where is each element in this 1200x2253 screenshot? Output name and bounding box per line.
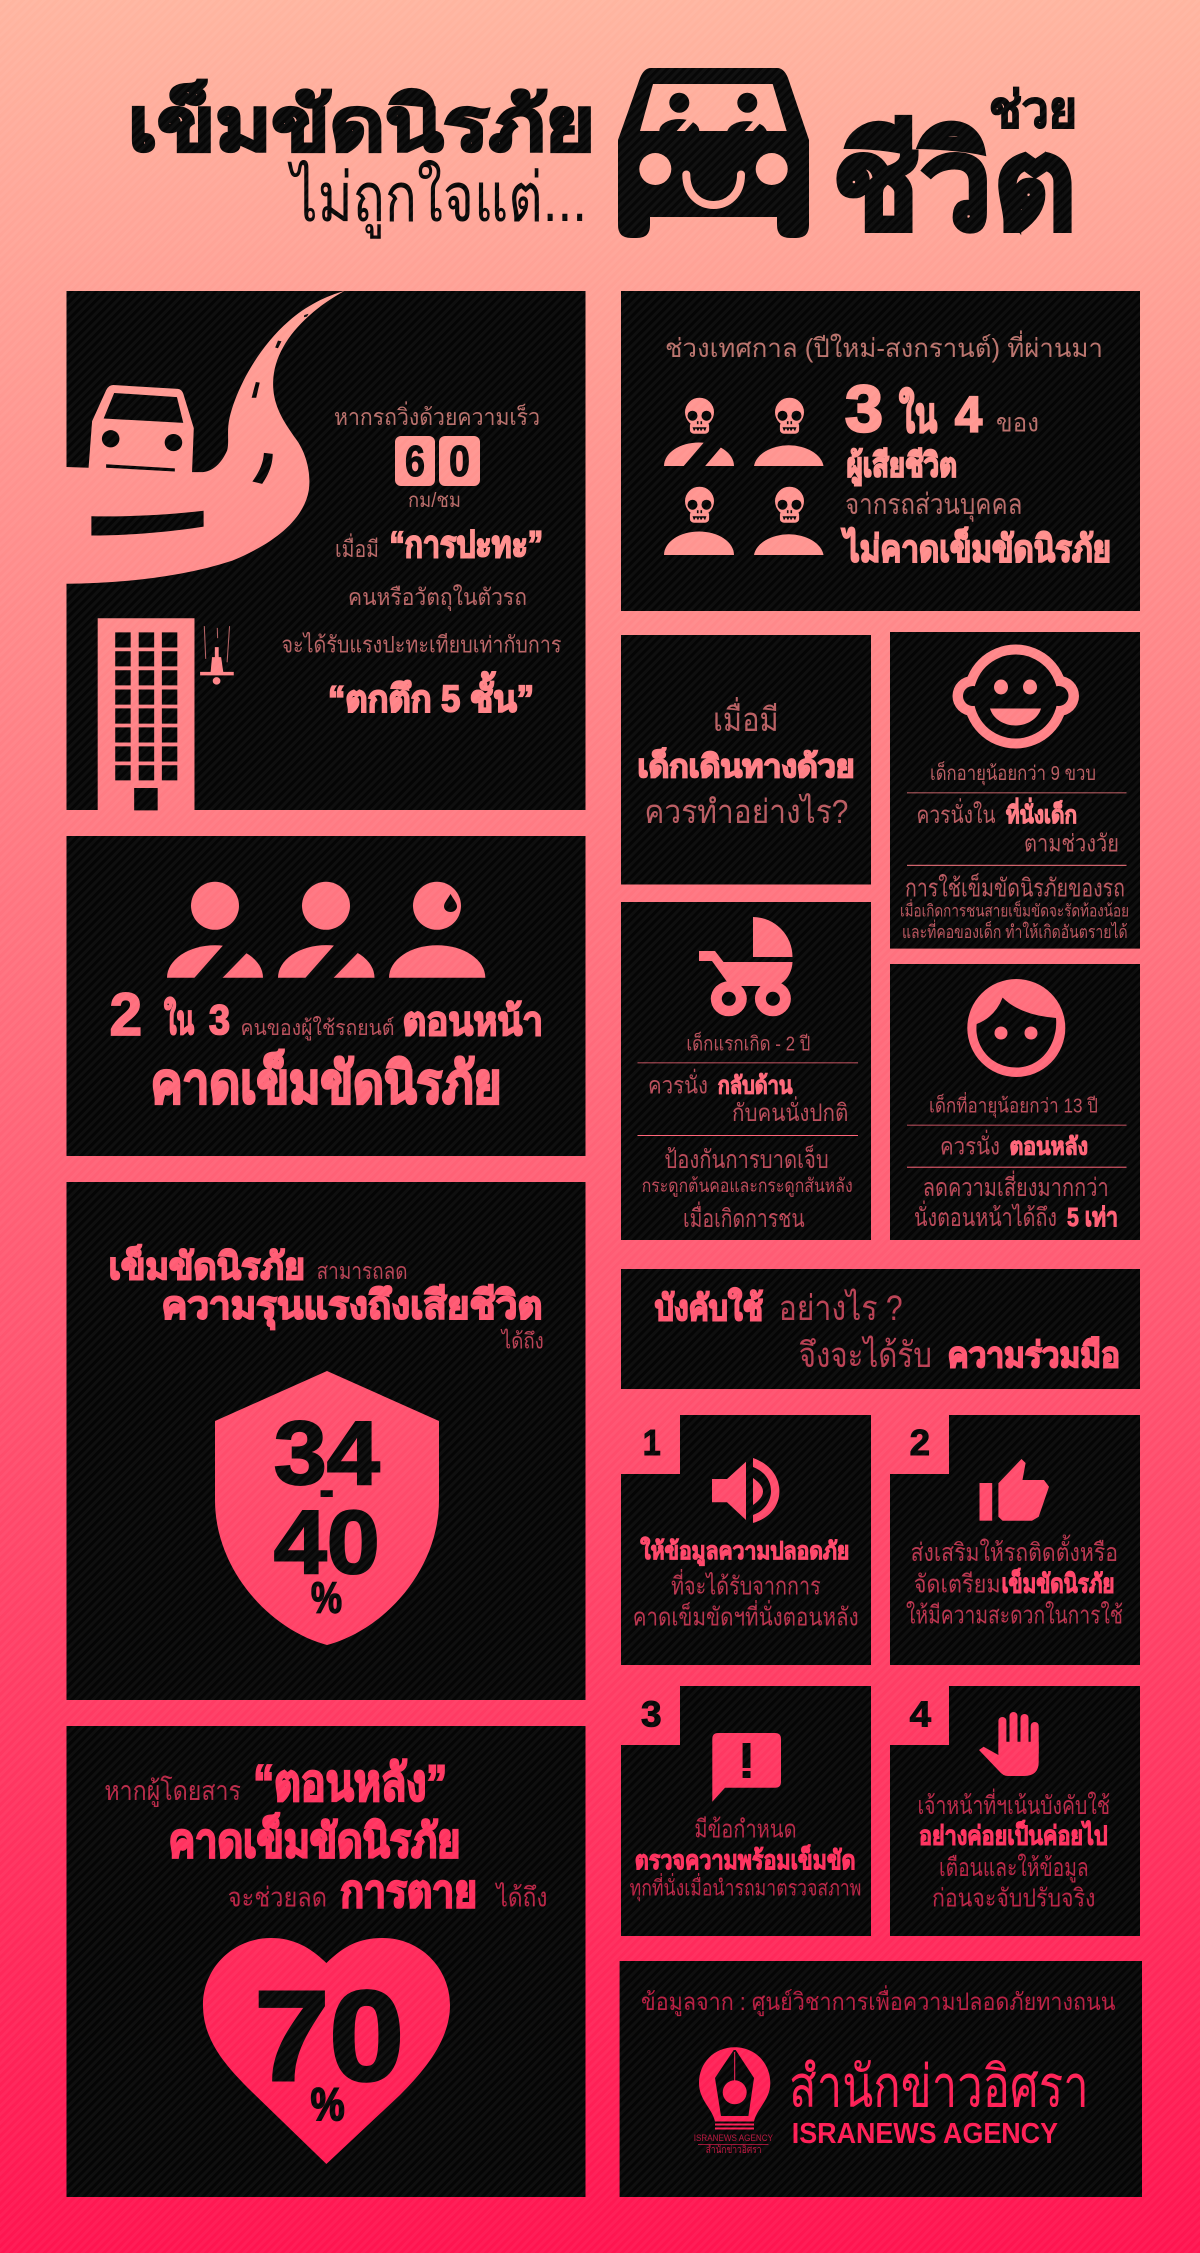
text: under 13 details: ควรนั่ง: [940, 1130, 1000, 1161]
text: 2 in 3: ใน: [164, 997, 194, 1043]
text: speed statement: “การปะทะ”: [390, 524, 543, 565]
panel: festival deaths: [621, 291, 1140, 611]
icon: shield with 34-40%: 34: [274, 1404, 380, 1504]
panel: front seat belt use: [66, 836, 586, 1156]
text: under 9 months details: เด็กอายุน้อยกว่า 9 ขวบ: [930, 760, 1096, 786]
panel: under 13 years: [890, 964, 1140, 1240]
text: belt reduces severity: ความรุนแรงถึงเสียชีวิต: [162, 1284, 542, 1329]
icon: alert bubble: [712, 1733, 781, 1802]
illustration: building: [98, 618, 194, 810]
text: under 9 months details: ที่นั่งเด็ก: [1006, 797, 1077, 829]
text: newborn details: [638, 1031, 858, 1233]
icon: stroller: [699, 917, 792, 1016]
text: data source: ข้อมูลจาก : ศูนย์วิชาการเพื่อความปลอดภัยทางถนน: [641, 1985, 1116, 2017]
icon: shield with 34-40%: -: [320, 1469, 333, 1513]
text: card 2: เข็มขัดนิรภัย: [1002, 1567, 1114, 1598]
text: rear passengers: หากผู้โดยสาร: [104, 1776, 241, 1807]
icon: heart with 70%: %: [311, 2078, 345, 2130]
icon: baby face: [952, 644, 1079, 748]
text: card 1: [633, 1536, 859, 1632]
number 2: 2: [910, 1422, 930, 1463]
text: rear passengers: คาดเข็มขัดนิรภัย: [169, 1813, 460, 1867]
text: card 4: เตือนและให้ข้อมูล: [939, 1853, 1089, 1883]
text: card 1: ที่จะได้รับจากการ: [671, 1568, 821, 1600]
text: speed statement: หากรถวิ่งด้วยความเร็ว: [334, 401, 540, 430]
icon: falling person: [200, 626, 234, 685]
text: card 3: มีข้อกำหนด: [694, 1815, 797, 1843]
panel: speed and impact: [66, 291, 585, 810]
icon: thumbs up: [980, 1459, 1049, 1521]
icon: child face: [967, 979, 1065, 1077]
text: under 13 details: 5 เท่า: [1067, 1202, 1118, 1232]
text: rear passengers: จะช่วยลด: [228, 1883, 327, 1913]
text: speed statement: คนหรือวัตถุในตัวรถ: [348, 584, 527, 611]
card 1: safety information: [621, 1415, 871, 1665]
text: newborn details: กลับด้าน: [718, 1072, 793, 1100]
number 4: 4: [910, 1694, 931, 1735]
panel: source and logo: [620, 1961, 1142, 2197]
icon: smiling car: [618, 68, 809, 238]
speed counter 60: [395, 436, 480, 486]
text: newborn details: เมื่อเกิดการชน: [683, 1201, 805, 1233]
text: how to enforce: บังคับใช้: [655, 1287, 763, 1328]
text: when travelling with children: เมื่อมี: [713, 697, 779, 738]
wordmark: Isranews Agency: สำนักข่าวอิศรา: [789, 2055, 1089, 2120]
text: rear passengers: “ตอนหลัง”: [253, 1755, 447, 1811]
text: 3 in 4: 4: [955, 387, 982, 443]
text: under 13 details: [907, 1092, 1126, 1232]
text: 3 in 4: [841, 372, 1111, 570]
text: card 3: ตรวจความพร้อมเข็มขัด: [635, 1844, 856, 1875]
logo: pen nib bulb: ISRANEWS AGENCY: [694, 2133, 773, 2143]
text: 2 in 3: 3: [209, 996, 230, 1043]
card 4: gradual enforcement: [890, 1686, 1140, 1936]
text: 3 in 4: ใน: [899, 387, 937, 443]
text: card 4: อย่างค่อยเป็นค่อยไป: [919, 1819, 1108, 1850]
heading: seat belt: เข็มขัดนิรภัย: [128, 81, 595, 166]
text: under 9 months details: การใช้เข็มขัดนิรภัยของรถ: [905, 873, 1125, 903]
text: under 13 details: เด็กที่อายุน้อยกว่า 13 ปี: [929, 1092, 1098, 1119]
text: how to enforce: อย่างไร ?: [779, 1288, 903, 1328]
text: card 1: คาดเข็มขัดฯที่นั่งตอนหลัง: [633, 1600, 859, 1632]
text: belt reduces severity: [109, 1243, 544, 1353]
icon: shield with 34-40%: 40: [274, 1493, 380, 1593]
text: 3 in 4: ผู้เสียชีวิต: [847, 447, 957, 487]
text: 2 in 3: 2: [110, 981, 142, 1048]
text: card 2: ส่งเสริมให้รถติดตั้งหรือ: [911, 1534, 1118, 1567]
text: 3 in 4: 3: [845, 372, 883, 446]
number 1: 1: [643, 1422, 661, 1463]
text: card 4: ก่อนจะจับปรับจริง: [932, 1885, 1096, 1913]
text: newborn details: ควรนั่ง: [648, 1068, 708, 1100]
text: under 13 details: ลดความเสี่ยงมากกว่า: [923, 1170, 1109, 1202]
text: 2 in 3: [110, 981, 543, 1115]
text: card 3: [630, 1815, 861, 1902]
text: 3 in 4: ของ: [996, 408, 1039, 438]
text: belt reduces severity: เข็มขัดนิรภัย: [109, 1243, 305, 1287]
text: rear passengers: [104, 1755, 548, 1917]
card 3: inspection rule: [621, 1686, 871, 1936]
wordmark: Isranews Agency: [789, 2055, 1089, 2150]
text: 2 in 3: คาดเข็มขัดนิรภัย: [151, 1049, 501, 1115]
panel: children question: [621, 635, 871, 884]
text: 2 in 3: คนของผู้ใช้รถยนต์: [240, 1016, 394, 1041]
panel: newborn to 2 years: [621, 902, 871, 1240]
text: how to enforce: ความร่วมมือ: [948, 1336, 1120, 1375]
panel: child under 9 months: [890, 632, 1140, 949]
text: card 2: จัดเตรียม: [914, 1570, 1001, 1598]
text: card 2: ให้มีความสะดวกในการใช้: [906, 1600, 1123, 1629]
text: card 2: [906, 1534, 1123, 1629]
title: [128, 68, 1077, 257]
speed counter 60: 6: [405, 437, 425, 486]
text: card 3: ทุกที่นั่งเมื่อนำรถมาตรวจสภาพ: [630, 1873, 861, 1902]
text: under 9 months details: เมื่อเกิดการชนสายเข็มขัดจะรัดท้องน้อย: [900, 899, 1129, 921]
icon: four skull figures: [664, 398, 824, 555]
text: 2 in 3: ตอนหน้า: [402, 1000, 543, 1044]
text: belt reduces severity: ได้ถึง: [500, 1328, 544, 1353]
text: when travelling with children: [638, 697, 854, 830]
speed counter 60: 0: [449, 437, 470, 486]
text: when travelling with children: เด็กเดินทางด้วย: [638, 747, 854, 784]
text: speed statement: จะได้รับแรงปะทะเทียบเท่ากับการ: [282, 632, 562, 658]
heading: life: ชีวิต: [832, 111, 1077, 257]
text: 3 in 4: จากรถส่วนบุคคล: [845, 489, 1022, 522]
illustration: car on winding road: [66, 291, 345, 810]
text: under 13 details: นั่งตอนหน้าได้ถึง: [914, 1200, 1057, 1232]
text: under 9 months details: ตามช่วงวัย: [1024, 830, 1119, 857]
text: rear passengers: การตาย: [340, 1868, 477, 1917]
panel: severity reduction: [66, 1182, 586, 1700]
text: belt reduces severity: สามารถลด: [317, 1258, 408, 1284]
text: newborn details: กับคนนั่งปกติ: [732, 1096, 848, 1127]
icon: heart with 70%: [203, 1938, 450, 2164]
text: when travelling with children: ควรทำอย่างไร?: [644, 793, 848, 830]
logo: pen nib bulb: [694, 2047, 773, 2156]
text: card 4: [918, 1788, 1110, 1913]
panel: rear seat belt: [66, 1726, 586, 2197]
text: card 4: เจ้าหน้าที่ฯเน้นบังคับใช้: [918, 1788, 1110, 1820]
icon: speaker: [712, 1458, 779, 1523]
text: under 9 months details: ควรนั่งใน: [916, 798, 996, 829]
panel: enforcement question: [621, 1269, 1140, 1389]
icon: heart with 70%: 70: [254, 1965, 404, 2108]
text: speed statement: [282, 401, 562, 720]
text: newborn details: เด็กแรกเกิด - 2 ปี: [686, 1031, 810, 1056]
text: newborn details: กระดูกต้นคอและกระดูกสันหลัง: [642, 1176, 853, 1197]
text: under 9 months details: [900, 760, 1129, 942]
subheading: not pleasing but: ไม่ถูกใจแต่...: [287, 159, 587, 239]
heading: festival period: ช่วงเทศกาล (ปีใหม่-สงกรานต์) ที่ผ่านมา: [665, 330, 1103, 363]
number 3: 3: [641, 1694, 662, 1735]
text: how to enforce: [655, 1287, 1120, 1375]
wordmark: Isranews Agency: ISRANEWS AGENCY: [792, 2118, 1058, 2150]
text: speed statement: เมื่อมี: [335, 533, 379, 562]
text: speed statement: “ตกตึก 5 ชั้น”: [328, 672, 534, 720]
icon: stop hand: [979, 1712, 1039, 1776]
text: under 13 details: ตอนหลัง: [1010, 1134, 1088, 1161]
icon: three people: [167, 882, 485, 978]
logo: pen nib bulb: สำนักข่าวอิศรา: [706, 2145, 762, 2156]
text: rear passengers: ได้ถึง: [495, 1883, 548, 1913]
text: newborn details: ป้องกันการบาดเจ็บ: [664, 1144, 829, 1174]
icon: shield with 34-40%: %: [311, 1574, 342, 1622]
heading: helps: ช่วย: [989, 82, 1077, 138]
text: under 9 months details: และที่คอของเด็ก ทำให้เกิดอันตรายได้: [902, 919, 1128, 942]
text: card 1: ให้ข้อมูลความปลอดภัย: [640, 1536, 849, 1566]
card 2: encourage installation: [890, 1415, 1140, 1665]
unit label: กม/ชม: [408, 490, 461, 512]
text: 3 in 4: ไม่คาดเข็มขัดนิรภัย: [841, 526, 1111, 570]
icon: shield with 34-40%: [215, 1371, 439, 1645]
text: how to enforce: จึงจะได้รับ: [799, 1335, 932, 1375]
